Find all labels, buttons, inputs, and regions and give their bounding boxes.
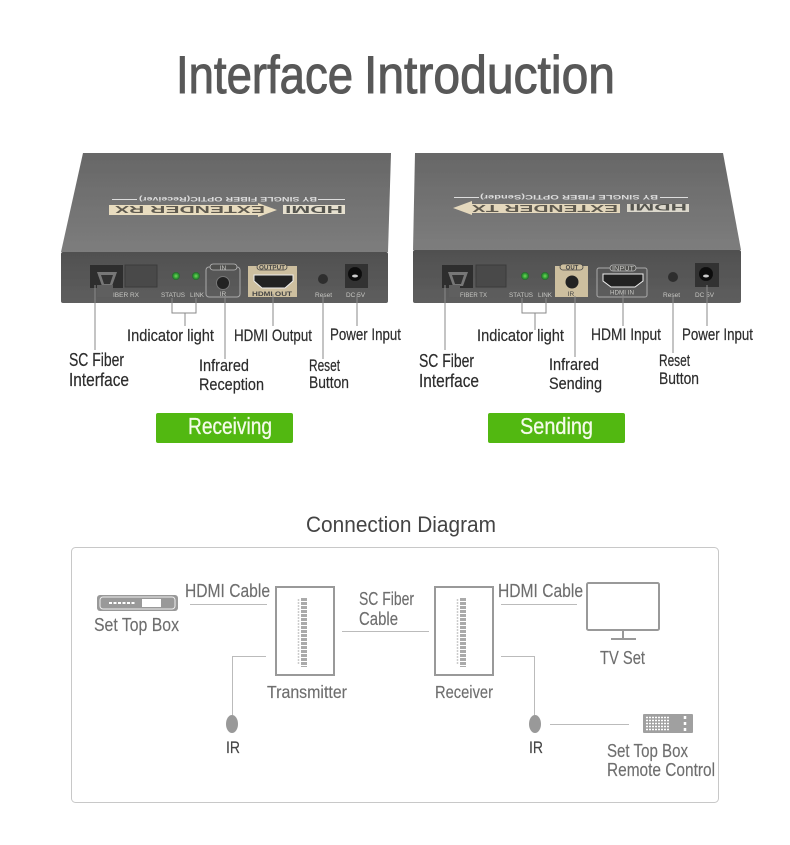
labels: receiver: Button [309, 374, 349, 392]
labels: receiver [69, 326, 401, 394]
printed label: receiver [109, 195, 345, 217]
port: DC power: DC 5V [346, 292, 366, 299]
indicator LEDs [161, 272, 205, 299]
port: HDMI output [248, 264, 297, 298]
labels: transmitter: SC Fiber [419, 350, 474, 371]
title: Interface [176, 46, 353, 105]
printed label: receiver: HDMI [285, 203, 343, 214]
panel: sending device [413, 153, 753, 443]
port: SC fiber [90, 265, 157, 299]
connector: SC fiber cable [342, 588, 429, 632]
labels: transmitter: Infrared [549, 356, 599, 374]
device front: transmitter [413, 250, 741, 303]
label: transmitter: Transmitter [267, 682, 347, 702]
reset button [315, 274, 332, 299]
connector: HDMI cable right: HDMI Cable [498, 580, 583, 601]
icon: transmitter [276, 587, 334, 675]
printed label: transmitter: HDMI [629, 201, 687, 212]
label: receiver: Receiver [435, 682, 493, 702]
labels: transmitter: Interface [419, 370, 479, 391]
icon: receiver [435, 587, 493, 675]
port: HDMI input: HDMI IN [610, 290, 634, 296]
panel: connection diagram [72, 548, 718, 802]
labels: transmitter: Button [659, 370, 699, 388]
port: DC power [695, 263, 719, 299]
badge: sending [488, 413, 625, 443]
connector: transmitter IR: IR [226, 738, 240, 757]
printed label: transmitter [453, 193, 689, 215]
icon: remote control [643, 714, 693, 733]
device front: receiver [61, 252, 388, 303]
printed label: transmitter: EXTENDER TX [471, 202, 618, 213]
label: set top box: Set Top Box [94, 614, 180, 635]
indicator LEDs: STATUS [509, 292, 534, 299]
labels: transmitter: Sending [549, 375, 602, 393]
badge: sending: Sending [520, 413, 593, 439]
labels: transmitter: Reset [659, 352, 690, 370]
port: infrared in [206, 264, 240, 298]
labels: receiver: SC Fiber [69, 349, 124, 370]
labels: receiver: Power Input [330, 326, 401, 344]
labels: receiver: HDMI Output [234, 327, 312, 345]
printed label: receiver: BY SINGLE FIBER OPTIC(Receiver) [139, 195, 317, 201]
label: TV set: TV Set [600, 647, 645, 668]
labels: transmitter: HDMI Input [591, 326, 661, 344]
labels: transmitter [419, 326, 753, 393]
labels: receiver: Reception [199, 376, 264, 394]
connector: SC fiber cable: Cable [359, 608, 398, 629]
port: infrared out [555, 264, 588, 298]
label: set top box remote control: Remote Control [607, 759, 715, 780]
indicator LEDs: STATUS [161, 292, 186, 299]
panel: receiving device [61, 153, 401, 443]
reset button: Reset [663, 292, 680, 299]
connector: receiver IR [501, 656, 629, 757]
labels: transmitter: Indicator light [477, 327, 564, 345]
icon: set top box [97, 595, 178, 611]
connector: SC fiber cable: SC Fiber [359, 588, 414, 609]
indicator LEDs: LINK [538, 292, 553, 299]
reset button: Reset [315, 292, 332, 299]
badge: receiving [156, 413, 293, 443]
connector: transmitter IR [226, 656, 266, 757]
port: HDMI output: HDMI OUT [252, 291, 292, 298]
port: infrared out: OUT [566, 266, 579, 272]
icon: TV set [587, 583, 659, 639]
title [176, 46, 615, 105]
port: infrared in: IN [220, 265, 227, 272]
port: HDMI input [597, 265, 647, 297]
port: infrared in: IR [220, 291, 227, 298]
badge: receiving: Receiving [188, 413, 272, 439]
printed label: transmitter: BY SINGLE FIBER OPTIC(Sender) [480, 193, 658, 199]
port: DC power [345, 264, 368, 299]
port: SC fiber [442, 265, 506, 299]
port: SC fiber: FIBER TX [460, 292, 488, 299]
leader lines: receiver [95, 285, 357, 359]
labels: transmitter: Power Input [682, 326, 753, 344]
port: HDMI input: INPUT [612, 266, 634, 272]
label: set top box remote control [607, 740, 715, 780]
labels: receiver: Indicator light [127, 327, 214, 345]
device top: transmitter [413, 153, 741, 250]
reset button [663, 272, 680, 299]
device top: receiver [61, 153, 391, 252]
heading: connection diagram: Connection Diagram [306, 512, 496, 537]
printed label: receiver: EXTENDER RX [115, 203, 265, 215]
indicator LEDs [509, 272, 553, 299]
connector: receiver IR: IR [529, 738, 543, 757]
port: HDMI output: OUTPUT [259, 266, 285, 272]
connector: HDMI cable left: HDMI Cable [185, 580, 270, 601]
port: DC power: DC 5V [695, 292, 715, 299]
port: infrared out: IR [568, 291, 575, 298]
labels: receiver: Infrared [199, 357, 249, 375]
labels: receiver: Interface [69, 369, 129, 390]
title: Introduction [364, 46, 615, 105]
port: SC fiber: IBER RX [113, 292, 140, 299]
leader lines: transmitter [445, 285, 707, 357]
label: set top box remote control: Set Top Box [607, 740, 689, 761]
labels: receiver: Reset [309, 357, 340, 375]
indicator LEDs: LINK [190, 292, 205, 299]
